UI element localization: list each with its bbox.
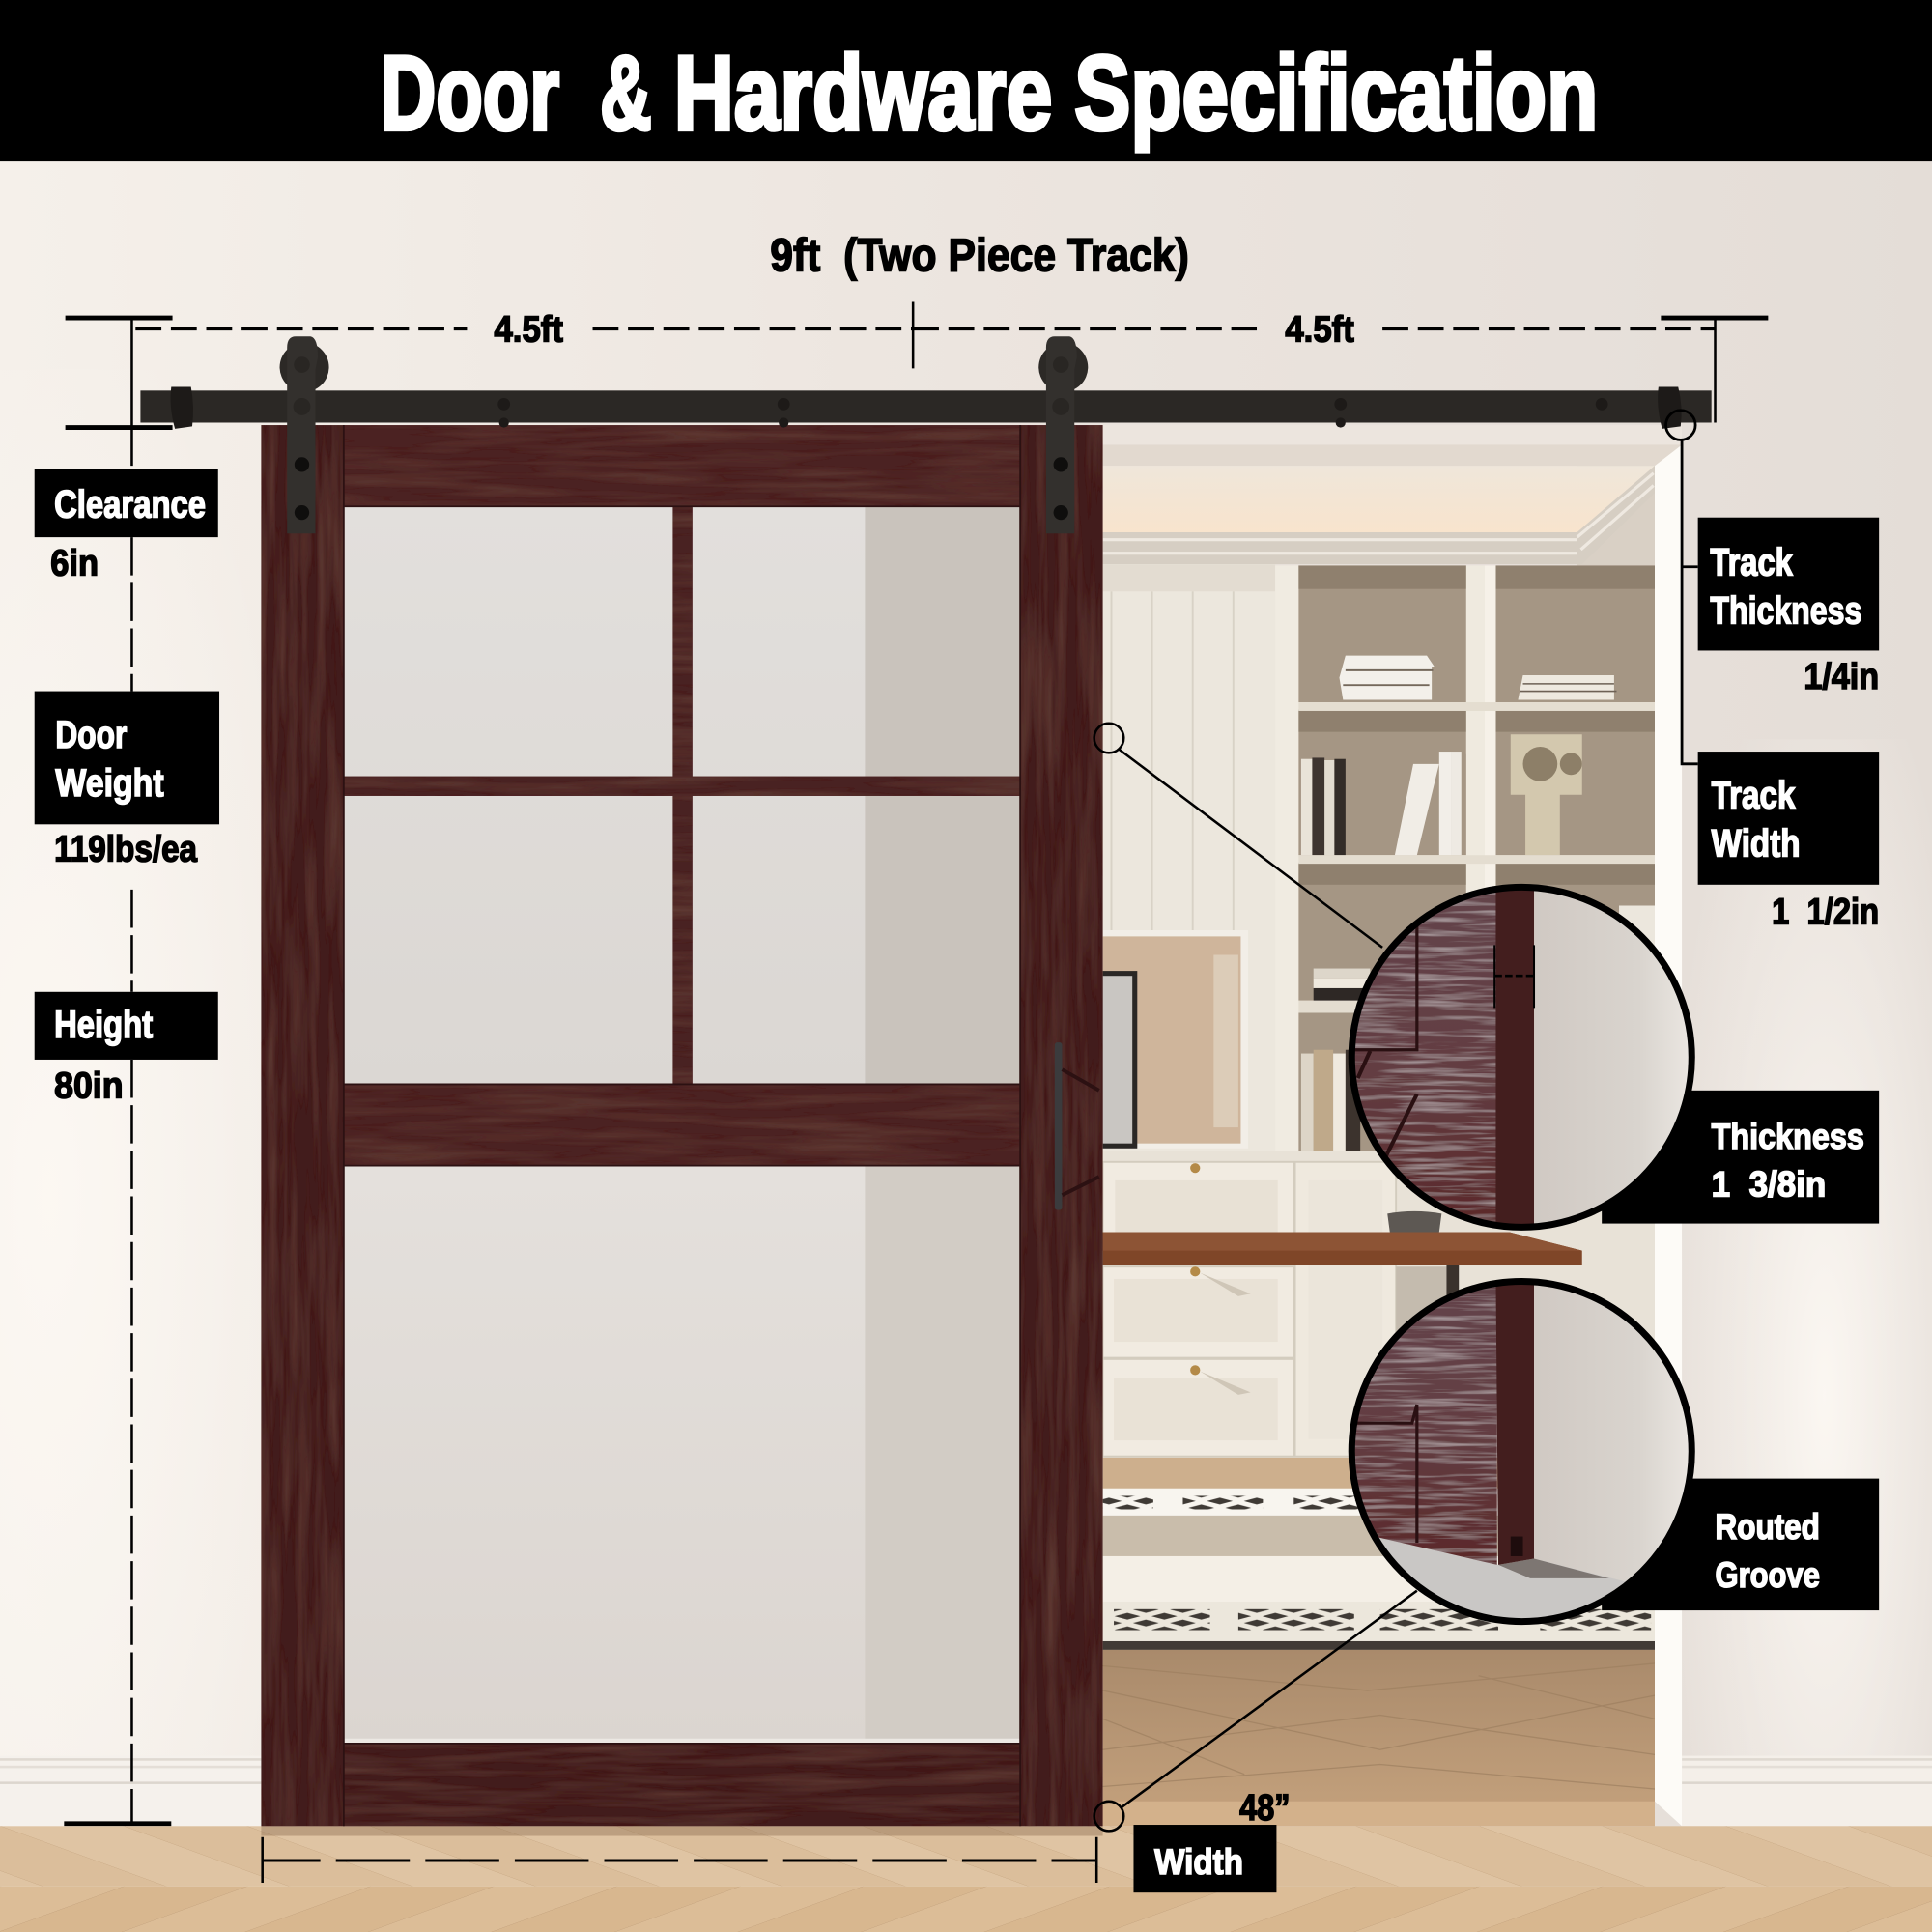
routed groove callout text bbox=[1716, 1507, 1820, 1595]
routed groove callout text: Groove bbox=[1716, 1555, 1820, 1595]
door stiles bbox=[261, 425, 1103, 1826]
stacked books on shelves bbox=[1301, 656, 1655, 1151]
framed artwork bbox=[1103, 930, 1248, 1149]
track width callout: 1 1/2in bbox=[1772, 892, 1879, 933]
width callout: 48” bbox=[1239, 1787, 1290, 1829]
thickness label box bbox=[1602, 1091, 1879, 1224]
magnifier: routed groove detail bbox=[1348, 1279, 1695, 1624]
clearance callout: 6in bbox=[50, 543, 99, 584]
track thickness callout: Track bbox=[1710, 542, 1794, 584]
height callout: Height bbox=[54, 1004, 153, 1046]
left roller hanger bbox=[280, 336, 329, 533]
height dimension line bbox=[64, 318, 173, 1824]
glass muntins bbox=[344, 506, 1020, 1084]
track length dimension line bbox=[135, 301, 1768, 423]
routed groove label box bbox=[1602, 1479, 1879, 1610]
cove light and crown moulding bbox=[1103, 466, 1655, 564]
width callout bbox=[1133, 1787, 1290, 1892]
track width callout bbox=[1698, 752, 1879, 933]
herringbone floor bbox=[0, 1826, 1932, 1932]
track callout leader bbox=[1665, 411, 1698, 764]
height callout bbox=[35, 992, 218, 1106]
door weight callout: Door bbox=[55, 714, 127, 756]
paneled wall bbox=[1103, 564, 1275, 930]
baseboards bbox=[0, 1756, 1932, 1826]
title banner bbox=[0, 0, 1932, 161]
height callout: 80in bbox=[54, 1065, 124, 1106]
thickness callout text: 1 3/8in bbox=[1712, 1165, 1826, 1205]
beige wall behind crown bbox=[1577, 493, 1655, 566]
routed groove callout text: Routed bbox=[1716, 1507, 1820, 1547]
groove callout leader bbox=[1094, 1591, 1417, 1831]
thickness callout leader bbox=[1094, 724, 1382, 948]
door weight callout: 119lbs/ea bbox=[54, 829, 198, 870]
cabinets and drawers bbox=[1103, 1151, 1447, 1458]
magnifier: door thickness detail bbox=[1348, 885, 1695, 1230]
right track segment label: 4.5ft bbox=[1285, 308, 1354, 350]
distant floor and rug bbox=[1103, 1458, 1655, 1826]
width callout: Width bbox=[1154, 1842, 1243, 1882]
barn door bbox=[261, 425, 1103, 1826]
title banner: & bbox=[600, 35, 652, 153]
track total length label: 9ft (Two Piece Track) bbox=[770, 230, 1189, 282]
door width dimension line bbox=[263, 1837, 1096, 1883]
left track segment label: 4.5ft bbox=[494, 308, 563, 350]
bookshelf bbox=[1275, 565, 1655, 1157]
door jamb bbox=[1655, 444, 1682, 1826]
thickness callout text: Thickness bbox=[1712, 1117, 1864, 1156]
track thickness callout: 1/4in bbox=[1804, 656, 1879, 697]
door weight callout: Weight bbox=[55, 762, 164, 805]
bowl and table leg bbox=[1387, 1211, 1459, 1297]
upper glass panels bbox=[344, 506, 1020, 1084]
soffit above opening bbox=[1103, 425, 1682, 466]
door handle bbox=[1055, 1042, 1099, 1210]
title banner: Specification bbox=[1074, 35, 1598, 153]
lower glass panel bbox=[344, 1166, 1020, 1744]
title banner: Door bbox=[381, 35, 559, 153]
track thickness callout bbox=[1698, 518, 1879, 697]
barn door track rail bbox=[140, 387, 1712, 429]
right roller hanger bbox=[1038, 336, 1088, 533]
track thickness callout: Thickness bbox=[1710, 589, 1861, 632]
clearance callout bbox=[35, 469, 218, 584]
thickness callout text bbox=[1712, 1117, 1864, 1205]
clearance callout: Clearance bbox=[54, 484, 206, 526]
door rails bbox=[344, 425, 1020, 1826]
track width callout: Track bbox=[1712, 775, 1796, 817]
track width callout: Width bbox=[1712, 822, 1801, 865]
room seen through doorway bbox=[1103, 425, 1682, 1826]
title banner: Hardware bbox=[674, 35, 1052, 153]
door weight callout bbox=[35, 692, 219, 870]
